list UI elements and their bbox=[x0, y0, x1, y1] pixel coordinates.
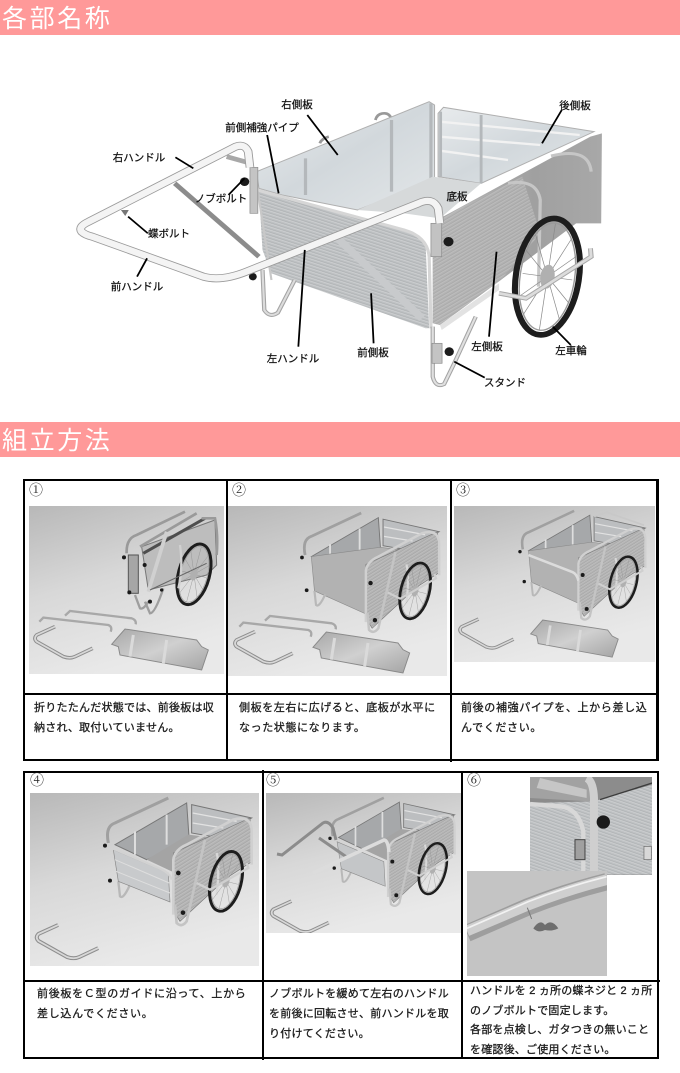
heading: 各部名称 bbox=[0, 0, 680, 35]
label: 底板: 底板 bbox=[446, 190, 468, 203]
table frame top bbox=[23, 479, 659, 761]
step text 5: ノブボルトを緩めて左右のハンドル bbox=[269, 988, 449, 1000]
step text 3 bbox=[461, 702, 647, 734]
step text 4: 前後板をＣ型のガイドに沿って、上から bbox=[37, 988, 246, 1000]
main cart diagram with part labels bbox=[76, 98, 602, 389]
label: ノブボルト: ノブボルト bbox=[195, 192, 247, 205]
cart illustration bbox=[81, 102, 602, 385]
heading: 組立方法: 組立方法 bbox=[2, 427, 112, 455]
divider: column 5/6 bbox=[461, 772, 463, 1058]
step text 3: 前後の補強パイプを、上から差し込 bbox=[461, 702, 647, 714]
step number 4: ④ bbox=[30, 774, 44, 789]
step number 2: ② bbox=[232, 484, 246, 499]
photo: handles rotated bbox=[266, 793, 461, 933]
step text 5: り付けてください。 bbox=[269, 1028, 370, 1040]
step text 6 bbox=[470, 984, 652, 1056]
step text 1: 折りたたんだ状態では、前後板は収 bbox=[34, 702, 214, 714]
step text 4: 差し込んでください。 bbox=[37, 1008, 153, 1020]
step text 6: ハンドルを 2 ヵ所の蝶ネジと 2 ヵ所 bbox=[470, 985, 652, 997]
label: 右ハンドル: 右ハンドル bbox=[113, 151, 165, 164]
step text 2: なった状態になります。 bbox=[239, 722, 366, 734]
label: スタンド: スタンド bbox=[484, 377, 526, 389]
label: 蝶ボルト: 蝶ボルト bbox=[148, 227, 190, 240]
divider: column 2/3 bbox=[450, 480, 452, 762]
step text 5 bbox=[269, 987, 449, 1040]
step number 1: ① bbox=[29, 484, 43, 499]
label: 左側板: 左側板 bbox=[471, 340, 503, 353]
label: 左車輪: 左車輪 bbox=[555, 344, 587, 357]
divider: lower row bbox=[24, 980, 660, 982]
panel: assembly steps 1-3 bbox=[23, 479, 659, 762]
step text 6: のノブボルトで固定します。 bbox=[470, 1004, 614, 1016]
step number 3: ③ bbox=[456, 484, 470, 499]
step text 6: を確認後、ご使用ください。 bbox=[470, 1044, 616, 1056]
step text 4 bbox=[37, 988, 246, 1020]
photo: knob bolt close-up bbox=[530, 777, 652, 875]
step text 2 bbox=[239, 702, 436, 734]
step text 2: 側板を左右に広げると、底板が水平に bbox=[239, 702, 436, 714]
table frame bottom bbox=[23, 771, 659, 1059]
label: 前側補強パイプ: 前側補強パイプ bbox=[225, 121, 299, 134]
divider: column 4/5 bbox=[262, 770, 264, 1060]
photo: wing nut close-up bbox=[467, 871, 607, 976]
step number 5: ⑤ bbox=[266, 774, 280, 789]
photo: side panels opened bbox=[228, 506, 447, 676]
panel: assembly steps 4-6 bbox=[23, 770, 660, 1060]
label: 左ハンドル: 左ハンドル bbox=[267, 352, 319, 365]
heading: 各部名称: 各部名称 bbox=[2, 5, 112, 33]
step text 1: 納され、取付いていません。 bbox=[34, 722, 180, 734]
step text 1 bbox=[34, 702, 214, 734]
leader lines bbox=[128, 110, 571, 378]
step text 6: 各部を点検し、ガタつきの無いこと bbox=[470, 1024, 649, 1036]
part labels and leader lines bbox=[111, 98, 591, 389]
photo: front panel fitted bbox=[30, 793, 259, 966]
divider: row bbox=[24, 693, 658, 695]
label: 前ハンドル: 前ハンドル bbox=[111, 280, 163, 293]
step number 6: ⑥ bbox=[467, 774, 481, 789]
label: 後側板: 後側板 bbox=[559, 99, 591, 112]
photo: reinforcing pipes inserted bbox=[454, 506, 655, 662]
step text 3: んでください。 bbox=[461, 722, 542, 734]
label: 前側板: 前側板 bbox=[357, 346, 389, 359]
photo: folded cart with loose parts bbox=[29, 506, 224, 674]
heading: 組立方法 bbox=[0, 422, 680, 457]
divider: column 1/2 bbox=[226, 480, 228, 760]
step text 5: を前後に回転させ、前ハンドルを取 bbox=[269, 1008, 449, 1020]
label: 右側板: 右側板 bbox=[281, 98, 313, 111]
